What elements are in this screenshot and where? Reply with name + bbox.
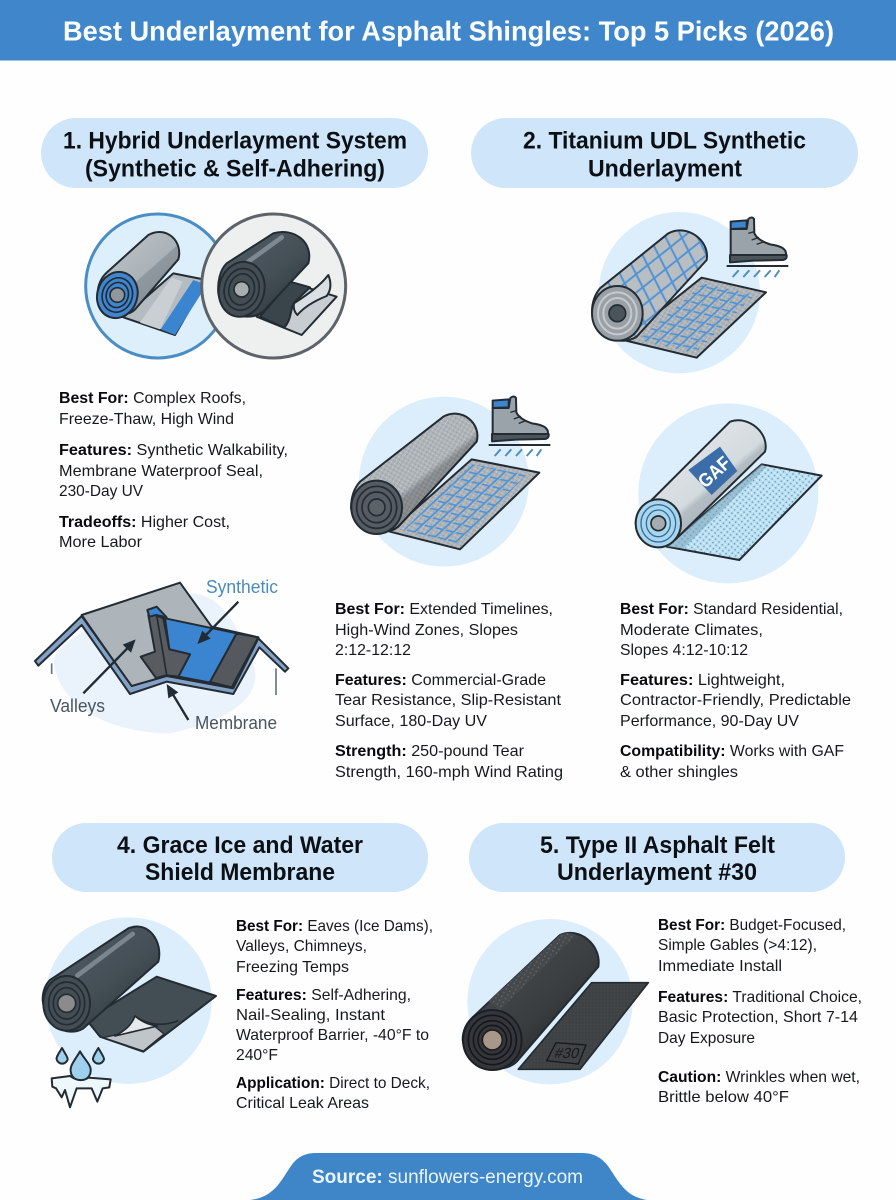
text block: pick 5 details: Brittle below 40°F [658, 1089, 789, 1106]
text block: pick 4 details: Nail-Sealing, Instant [236, 1007, 386, 1024]
heading: pick 4: Shield Membrane [145, 859, 335, 886]
title [0, 0, 896, 60]
text block: pick 4 details [236, 918, 433, 1112]
mark: #30 label: #30 [552, 1045, 582, 1062]
diagram: roof with valleys, membrane and synthetic [35, 583, 288, 733]
text block: right column details: & other shingles [620, 764, 738, 781]
text block: pick 1 details: Freeze-Thaw, High Wind [59, 411, 234, 428]
text block: pick 5 details: Basic Protection, Short 7-14 [658, 1009, 858, 1026]
text block: pick 4 details: Waterproof Barrier, -40°F to [236, 1027, 429, 1044]
text block: pick 1 details: Best For: Complex Roofs, [59, 390, 246, 407]
heading: pick 5: Underlayment #30 [557, 859, 757, 886]
text block: right column details: Features: Lightweight, [620, 672, 785, 689]
text block: middle column details: Features: Commercial-Grade [335, 672, 546, 689]
arrow: to synthetic [197, 602, 238, 644]
text block: right column details: Compatibility: Works with GAF [620, 743, 844, 760]
text block: middle column details: Strength, 160-mph Wind Rating [335, 764, 563, 781]
label: membrane: Membrane [195, 713, 277, 733]
text block: pick 4 details: Freezing Temps [236, 959, 349, 976]
text block: pick 5 details: Best For: Budget-Focused, [658, 917, 846, 934]
icon: synthetic and membrane rolls [86, 214, 346, 358]
text block: middle column details: High-Wind Zones, Slopes [335, 622, 518, 639]
heading: pick 5 [469, 823, 845, 892]
label: valleys: Valleys [50, 696, 105, 716]
text block: middle column details: Tear Resistance, Slip-Resistant [335, 692, 562, 709]
text block: pick 1 details: Membrane Waterproof Seal, [59, 463, 263, 480]
text block: right column details [620, 601, 851, 781]
heading: pick 4: 4. Grace Ice and Water [117, 832, 363, 859]
text block: pick 4 details: Application: Direct to Deck, [236, 1075, 430, 1092]
icon: GAF roll [636, 403, 822, 583]
text block: pick 1 details: More Labor [59, 534, 143, 551]
icon: boot [727, 217, 788, 277]
text block: pick 4 details: 240°F [236, 1047, 278, 1064]
arrow: to membrane [167, 684, 188, 720]
icon: titanium roll with boot [592, 212, 788, 373]
heading: pick 2 [471, 118, 858, 188]
text block: middle column details: Best For: Extended Timelines, [335, 601, 553, 618]
text block: pick 5 details: Immediate Install [658, 958, 782, 975]
text block: middle column details: 2:12-12:12 [335, 642, 411, 659]
icon: water drops [57, 1048, 104, 1081]
text block: right column details: Moderate Climates, [620, 622, 763, 639]
panel: extended-timeline roll (middle column) [335, 396, 563, 781]
text block: pick 1 details [59, 390, 288, 551]
text block: pick 1 details: 230-Day UV [59, 483, 143, 500]
text block: middle column details: Surface, 180-Day UV [335, 713, 487, 730]
icon: icicles [52, 1076, 111, 1107]
icon: boot [489, 396, 550, 456]
heading: pick 1 [41, 118, 428, 188]
text block: pick 5 details: Caution: Wrinkles when wet, [658, 1069, 860, 1086]
icon: membrane roll with ice and drops [43, 917, 216, 1107]
panel: GAF roll (right column) [620, 403, 851, 781]
panel: type II asphalt felt underlayment [463, 823, 862, 1106]
text block: right column details: Contractor-Friendly, Predictable [620, 692, 851, 709]
panel: grace ice and water shield membrane [43, 823, 433, 1112]
panel: titanium UDL synthetic underlayment [471, 118, 858, 373]
panel: hybrid underlayment system [35, 118, 428, 733]
text block: pick 5 details: Features: Traditional Choice, [658, 989, 862, 1006]
heading: pick 1: (Synthetic & Self-Adhering) [85, 156, 385, 182]
logo: GAF: GAF [695, 453, 736, 493]
heading: pick 1: 1. Hybrid Underlayment System [63, 128, 407, 154]
heading: pick 2: Underlayment [588, 156, 742, 182]
label: synthetic: Synthetic [206, 577, 278, 597]
text block: pick 5 details: Day Exposure [658, 1030, 755, 1047]
source footer: Source: sunflowers-energy.com [312, 1167, 583, 1188]
heading: pick 4 [52, 823, 428, 892]
text block: middle column details [335, 601, 563, 781]
text block: right column details: Slopes 4:12-10:12 [620, 642, 748, 659]
text block: pick 4 details: Best For: Eaves (Ice Dams), [236, 918, 433, 935]
text block: pick 5 details [658, 917, 862, 1106]
text block: pick 5 details: Simple Gables (>4:12), [658, 937, 817, 954]
heading: pick 2: 2. Titanium UDL Synthetic [523, 128, 806, 154]
mark: #30 label [547, 1043, 586, 1064]
icon: felt roll marked #30 [463, 919, 648, 1084]
arrow: to valleys [83, 639, 136, 693]
text block: pick 4 details: Features: Self-Adhering, [236, 987, 411, 1004]
title: Best Underlayment for Asphalt Shingles: Top 5 Picks (2026) [63, 16, 834, 46]
text block: pick 4 details: Valleys, Chimneys, [236, 938, 367, 955]
text block: middle column details: Strength: 250-pound Tear [335, 743, 525, 760]
heading: pick 5: 5. Type II Asphalt Felt [540, 832, 775, 859]
text block: pick 1 details: Features: Synthetic Walkability, [59, 442, 288, 459]
text block: right column details: Performance, 90-Day UV [620, 713, 799, 730]
text block: pick 4 details: Critical Leak Areas [236, 1095, 369, 1112]
text block: right column details: Best For: Standard Residential, [620, 601, 843, 618]
source footer [250, 1153, 647, 1200]
text block: pick 1 details: Tradeoffs: Higher Cost, [59, 514, 230, 531]
icon: dotted roll with mesh and boot [351, 396, 550, 567]
